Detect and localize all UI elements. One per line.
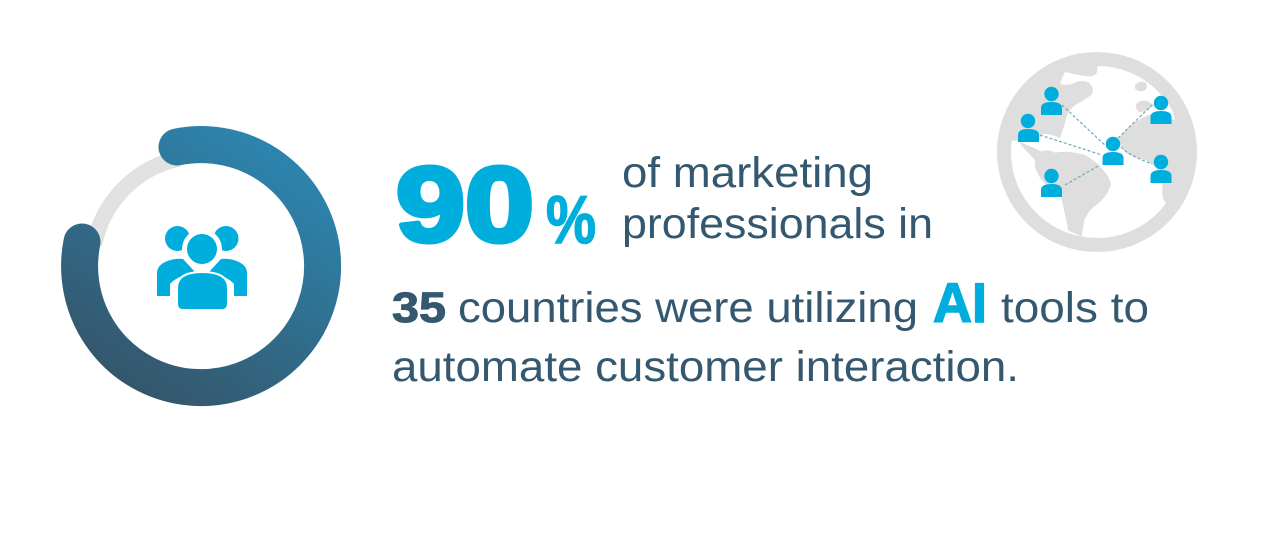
map continents bbox=[1012, 66, 1183, 236]
connection lines bbox=[1040, 105, 1152, 185]
text: 35 countries were utilizing AI tools to bbox=[392, 271, 1149, 334]
big stat: 90%: % bbox=[546, 182, 596, 258]
text: 35 countries were utilizing AI tools to: countries were utilizing bbox=[458, 284, 918, 332]
big stat: 90%: 90 bbox=[396, 146, 534, 264]
icon: group of people bbox=[157, 226, 247, 309]
text: of marketing professionals in: of marketing bbox=[622, 149, 873, 197]
text: automate customer interaction: automate customer interaction. bbox=[392, 343, 1019, 391]
text: 35 countries were utilizing AI tools to: tools to bbox=[1001, 284, 1149, 332]
infographic bbox=[61, 52, 1197, 406]
text: 35 countries were utilizing AI tools to: AI bbox=[933, 271, 987, 334]
text: of marketing professionals in bbox=[622, 149, 933, 248]
big stat: 90% bbox=[396, 146, 596, 264]
person markers bbox=[1018, 87, 1172, 197]
text: 35 countries were utilizing AI tools to: 35 bbox=[392, 284, 446, 332]
text: of marketing professionals in: professionals in bbox=[622, 200, 933, 248]
donut chart: 90% bbox=[80, 145, 323, 388]
icon: globe with connected people bbox=[1004, 59, 1192, 245]
